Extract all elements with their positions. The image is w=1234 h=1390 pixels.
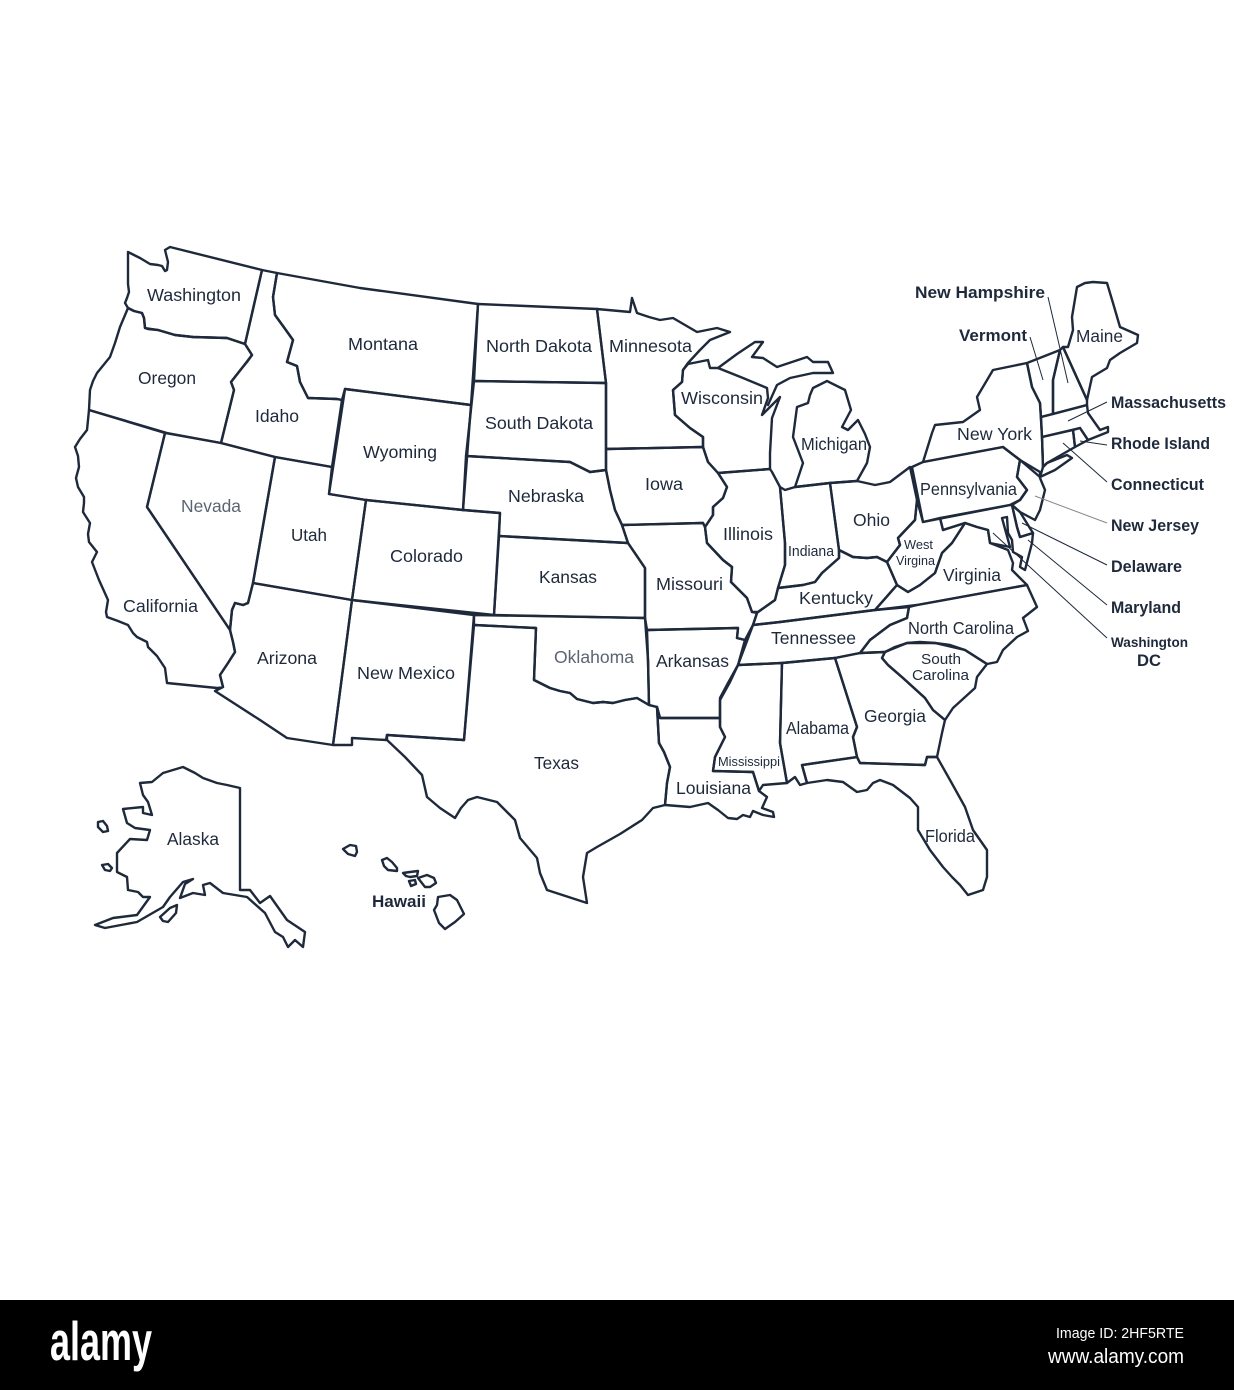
label: Vermont: Vermont <box>959 327 1028 345</box>
state: Wisconsin <box>673 360 780 473</box>
state: Washington <box>125 247 262 344</box>
state: Indiana: Indiana <box>788 544 835 560</box>
state: Wyoming <box>329 389 471 510</box>
state: Pennsylvania <box>912 447 1027 522</box>
state: South Carolina <box>882 642 987 720</box>
state: Texas <box>387 625 670 903</box>
state: Virginia <box>875 523 1027 610</box>
state: Utah <box>253 457 366 600</box>
state: Colorado: Colorado <box>390 546 463 566</box>
state: West Virginia: Virgina <box>896 553 936 568</box>
state: Michigan <box>718 342 870 487</box>
state: Alabama: Alabama <box>786 718 849 738</box>
state: Tennessee <box>738 607 909 665</box>
state: Kentucky <box>753 550 897 625</box>
state: South Carolina: South <box>921 651 961 668</box>
state: Montana <box>273 273 478 405</box>
label: Washington DC: Washington <box>1111 635 1188 650</box>
state: Oregon: Oregon <box>138 368 196 388</box>
state: Kansas <box>494 536 645 618</box>
state: Oklahoma <box>474 615 649 705</box>
state: Massachusetts <box>1041 405 1108 440</box>
state: Illinois: Illinois <box>723 524 773 544</box>
state: North Dakota <box>474 304 606 383</box>
label: Vermont <box>959 327 1043 380</box>
state: Washington: Washington <box>147 285 241 305</box>
state: Indiana <box>778 483 839 588</box>
label: Maryland: Maryland <box>1111 599 1181 617</box>
state: Idaho <box>221 270 342 467</box>
state: South Carolina: Carolina <box>912 667 970 684</box>
state: Alaska: Alaska <box>167 829 219 849</box>
state: Florida <box>802 757 987 895</box>
state: Nebraska: Nebraska <box>508 486 584 506</box>
state: Alaska <box>95 767 305 947</box>
state: Nevada <box>147 433 275 630</box>
state: Minnesota <box>597 298 730 449</box>
state: New Mexico: New Mexico <box>357 663 455 683</box>
footer bar <box>0 1300 1234 1390</box>
label: New Jersey <box>1035 496 1200 535</box>
state: Illinois <box>705 469 785 612</box>
state: Minnesota: Minnesota <box>609 336 692 356</box>
logo: alamy: alamy <box>50 1310 152 1372</box>
state: Wisconsin: Wisconsin <box>681 388 763 408</box>
state: Maine <box>1063 282 1138 400</box>
state: South Dakota <box>466 381 606 472</box>
state: Hawaii: Hawaii <box>372 893 426 911</box>
state: Iowa <box>606 447 727 527</box>
state: Nevada: Nevada <box>181 496 241 516</box>
state: Vermont <box>1027 350 1060 417</box>
state: Wyoming: Wyoming <box>363 442 437 462</box>
state: Texas: Texas <box>534 753 579 773</box>
image id: Image ID: 2HF5RTE <box>1056 1325 1184 1342</box>
label: New Hampshire: New Hampshire <box>915 284 1045 302</box>
state: Idaho: Idaho <box>255 406 299 426</box>
state: Utah: Utah <box>291 525 327 545</box>
state: Oregon <box>89 308 252 443</box>
state: Colorado <box>352 500 500 615</box>
label: Maryland <box>1028 540 1181 617</box>
state: Florida: Florida <box>925 826 975 846</box>
state: New Jersey <box>1012 460 1045 520</box>
state: Pennsylvania: Pennsylvania <box>920 479 1017 499</box>
label: Massachusetts: Massachusetts <box>1111 394 1226 412</box>
state: North Dakota: North Dakota <box>486 336 592 356</box>
leader labels: northeast states <box>915 284 1226 670</box>
label: Washington DC <box>993 533 1188 670</box>
state: West Virginia: West <box>904 537 933 552</box>
state: New Mexico <box>333 600 474 745</box>
state: Louisiana <box>657 707 774 819</box>
state: Arizona <box>215 583 352 745</box>
label: Connecticut: Connecticut <box>1111 476 1204 494</box>
state: Mississippi <box>713 663 787 791</box>
state: California: California <box>123 596 198 616</box>
label: Delaware: Delaware <box>1111 558 1182 576</box>
state: Rhode Island <box>1073 428 1088 447</box>
state: Arizona: Arizona <box>257 648 317 668</box>
label: Massachusetts <box>1068 394 1226 421</box>
state: South Dakota: South Dakota <box>485 413 593 433</box>
state: Nebraska <box>463 456 628 543</box>
state: Ohio: Ohio <box>853 510 890 530</box>
state: New Hampshire <box>1053 347 1087 414</box>
state: Georgia: Georgia <box>864 706 926 726</box>
label: Rhode Island: Rhode Island <box>1111 435 1210 453</box>
label: Washington DC: DC <box>1137 652 1161 670</box>
label: Connecticut <box>1063 443 1204 494</box>
state: Michigan: Michigan <box>801 434 867 454</box>
state: Maine: Maine <box>1076 326 1123 346</box>
state: West Virginia <box>887 500 965 592</box>
state: Georgia <box>835 652 945 765</box>
state: Ohio <box>830 467 917 562</box>
state: California <box>75 410 235 688</box>
state: Louisiana: Louisiana <box>676 778 751 798</box>
state: Arkansas: Arkansas <box>656 651 729 671</box>
state: North Carolina: North Carolina <box>908 618 1014 638</box>
state: Kansas: Kansas <box>539 567 597 587</box>
state: Connecticut <box>1042 430 1075 467</box>
state: New York <box>923 363 1072 477</box>
state: Oklahoma: Oklahoma <box>554 647 634 667</box>
label: New Hampshire <box>915 284 1068 383</box>
label: New Jersey: New Jersey <box>1111 517 1200 535</box>
state: Arkansas <box>647 628 745 718</box>
state: Tennessee: Tennessee <box>771 628 856 648</box>
state: New York: New York <box>957 424 1032 444</box>
state: Maryland <box>940 505 1033 570</box>
state: Missouri: Missouri <box>656 574 723 594</box>
state: Virginia: Virginia <box>943 565 1001 585</box>
website: www.alamy.com <box>1047 1346 1184 1368</box>
label: Delaware <box>1022 523 1182 576</box>
state: Montana: Montana <box>348 334 418 354</box>
state: Delaware <box>1012 505 1033 537</box>
state: Iowa: Iowa <box>645 474 683 494</box>
state: Mississippi: Mississippi <box>718 754 780 769</box>
state: Missouri <box>622 523 757 640</box>
state: Alabama <box>780 658 857 785</box>
state: North Carolina <box>860 585 1037 664</box>
state: Kentucky: Kentucky <box>799 588 873 608</box>
state: Hawaii <box>343 845 464 929</box>
